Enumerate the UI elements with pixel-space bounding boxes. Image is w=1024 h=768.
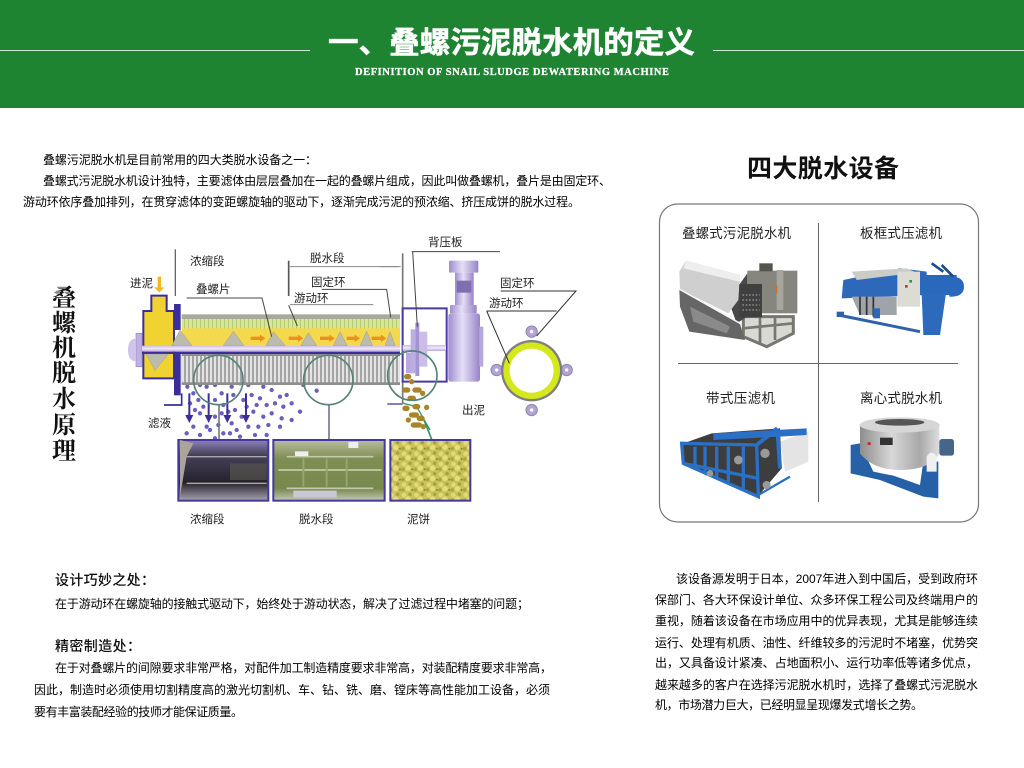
vertical heading: principle [52, 285, 78, 465]
back pressure plate and housing [400, 253, 405, 403]
text block: clever design [55, 572, 529, 611]
intro text block: 游动环依序叠加排列，在贯穿滤体的变距螺旋轴的驱动下，逐渐完成污泥的预浓缩、挤压成饼的脱水过程。 [23, 194, 580, 209]
diagram labels: 浓缩段 [190, 512, 225, 526]
photo: thickening section [178, 440, 268, 501]
intro text block [23, 152, 611, 209]
diagram labels: 背压板 [428, 235, 463, 249]
text block: market description: 运行、处理有机质、油性、纤维较多的污泥时不堵塞，优势突 [655, 635, 978, 650]
filtrate arrows [185, 393, 250, 423]
diagram labels: 泥饼 [407, 512, 430, 526]
feed hopper [143, 296, 174, 378]
device: belt filter press [682, 391, 808, 497]
heading: four dewatering devices: 四大脱水设备 [747, 155, 899, 183]
vertical heading: principle: 水 [52, 386, 76, 413]
text block: market description: 重视，随着该设备在市场应用中的优异表现，尤其是能够连续 [655, 613, 978, 628]
filtrate dots [183, 380, 317, 457]
diagram labels: 固定环 [500, 276, 534, 290]
device: plate frame filter press [837, 226, 964, 335]
title: 一、叠螺污泥脱水机的定义 [328, 27, 695, 60]
diagram labels: 叠螺片 [196, 283, 230, 296]
leader lines [187, 261, 398, 337]
diagram labels: 游动环 [489, 297, 524, 310]
vertical heading: principle: 原 [52, 412, 77, 439]
panel: four devices [660, 204, 978, 522]
device: screw press [679, 226, 797, 347]
header banner [0, 0, 1024, 108]
text block: market description: 越来越多的客户在选择污泥脱水机时，选择了叠螺式污泥脱水 [655, 677, 978, 692]
text block: precision manufacturing: 在于对叠螺片的间隙要求非常严格，对配件加工制造精度要求非常高，对装配精度要求非常高， [55, 660, 552, 675]
diagram labels: 出泥 [462, 403, 485, 417]
text block: precision manufacturing: 要有丰富装配经验的技师才能保证质量。 [34, 704, 243, 719]
photo: dewatering section [273, 440, 385, 501]
device: centrifuge: 离心式脱水机 [860, 390, 942, 406]
diagram labels: 固定环 [311, 275, 346, 289]
feed arrow [154, 277, 164, 293]
diagram labels: 浓缩段 [190, 254, 225, 268]
vertical heading: principle: 机 [52, 335, 76, 362]
text block: market description: 机，市场潜力巨大，已经明显呈现爆发式增长之势。 [655, 697, 923, 712]
diagram labels: 滤液 [148, 416, 171, 430]
device: screw press: 叠螺式污泥脱水机 [682, 226, 792, 241]
diagram: snail dewatering machine [128, 249, 576, 501]
vertical heading: principle: 螺 [52, 310, 78, 337]
vertical heading: principle: 叠 [52, 285, 76, 312]
text block: market description: 该设备源发明于日本，2007年进入到中国后，受到政府环 [676, 571, 978, 586]
photo: sludge cake [390, 440, 470, 501]
flow arrows [251, 335, 386, 342]
diagram labels: 脱水段 [299, 512, 334, 526]
diagram labels: 游动环 [294, 292, 328, 305]
intro text block: 叠螺污泥脱水机是目前常用的四大类脱水设备之一： [43, 152, 317, 167]
text block: market description: 出，又具备设计紧凑、占地面积小、运行功率低等诸多优点， [655, 655, 978, 670]
sub-heading: clever design: 设计巧妙之处： [55, 572, 155, 588]
subtitle: DEFINITION OF SNAIL SLUDGE DEWATERING MACHINE [355, 67, 669, 78]
vertical heading: principle: 脱 [52, 360, 76, 387]
diagram labels: 进泥 [130, 277, 153, 290]
text block: precision manufacturing [34, 638, 552, 719]
vertical heading: principle: 理 [52, 438, 76, 465]
inspection circles [194, 355, 353, 440]
diagram labels: 脱水段 [310, 251, 345, 265]
end bearing [136, 333, 142, 367]
device: plate frame filter press: 板框式压滤机 [860, 226, 942, 241]
diagram labels [130, 235, 534, 526]
text block: clever design: 在于游动环在螺旋轴的接触式驱动下，始终处于游动状态，解决了过滤过程中堵塞的问题； [55, 596, 529, 611]
screw flights [146, 330, 395, 371]
filter tube [182, 314, 400, 319]
ring section [491, 326, 572, 416]
device: centrifuge [851, 390, 954, 498]
motor [449, 261, 478, 273]
sludge cake falling [403, 403, 430, 430]
text block: precision manufacturing: 因此，制造时必须使用切割精度高的激光切割机、车、钻、铣、磨、镗床等高性能加工设备，必须 [34, 682, 550, 697]
device: belt filter press: 带式压滤机 [706, 391, 776, 406]
text block: market description [655, 571, 978, 712]
intro text block: 叠螺式污泥脱水机设计独特，主要滤体由层层叠加在一起的叠螺片组成，因此叫做叠螺机，叠片是由固定环、 [43, 173, 611, 188]
sub-heading: precision manufacturing: 精密制造处： [55, 638, 141, 654]
text block: market description: 保部门、各大环保设计单位、众多环保工程公司及终端用户的 [655, 592, 978, 607]
screw shaft [142, 346, 400, 352]
